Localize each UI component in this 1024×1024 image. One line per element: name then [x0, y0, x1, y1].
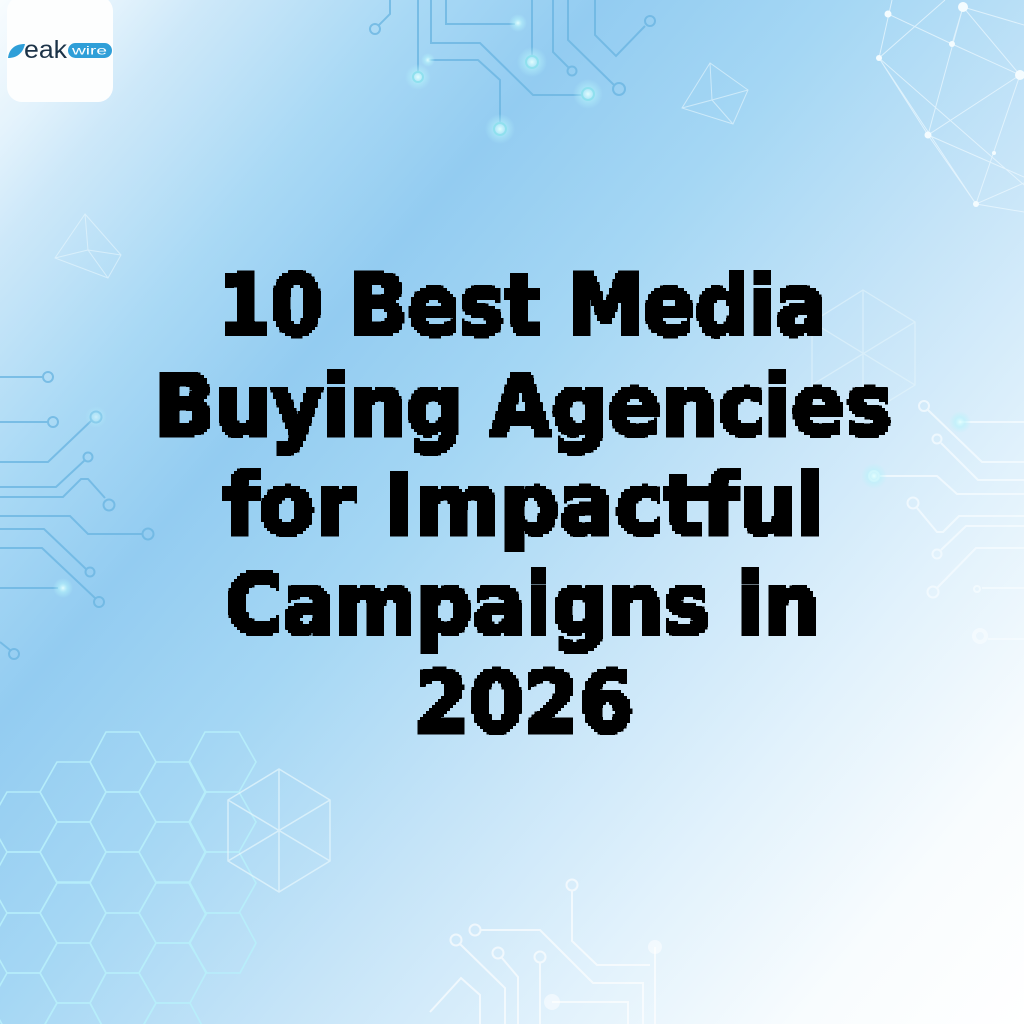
title: Campaigns in: [225, 556, 820, 655]
logo badge: [7, 0, 113, 102]
icon: wireframe hexagon centre right: [812, 290, 915, 417]
icon: wireframe pyramid top centre: [682, 63, 748, 124]
icon: wireframe cube bottom left: [228, 769, 330, 892]
title: 10 Best Media: [217, 257, 827, 356]
icon: logo leaf: [8, 44, 25, 58]
logo pill: wire: [70, 44, 107, 58]
circuit traces left: [0, 372, 154, 659]
title: Buying Agencies: [155, 357, 892, 456]
title: 2026: [414, 654, 634, 753]
title: [155, 257, 892, 753]
network graph top right: [876, 0, 1024, 212]
circuit traces top: [370, 0, 655, 144]
circuit traces right: [861, 401, 1024, 642]
circuit traces bottom: [430, 880, 662, 1024]
icon: wireframe pyramid left: [55, 214, 121, 278]
logo wordmark: eak: [24, 36, 68, 64]
honeycomb pattern: [0, 732, 256, 1024]
title: for Impactful: [223, 456, 825, 555]
